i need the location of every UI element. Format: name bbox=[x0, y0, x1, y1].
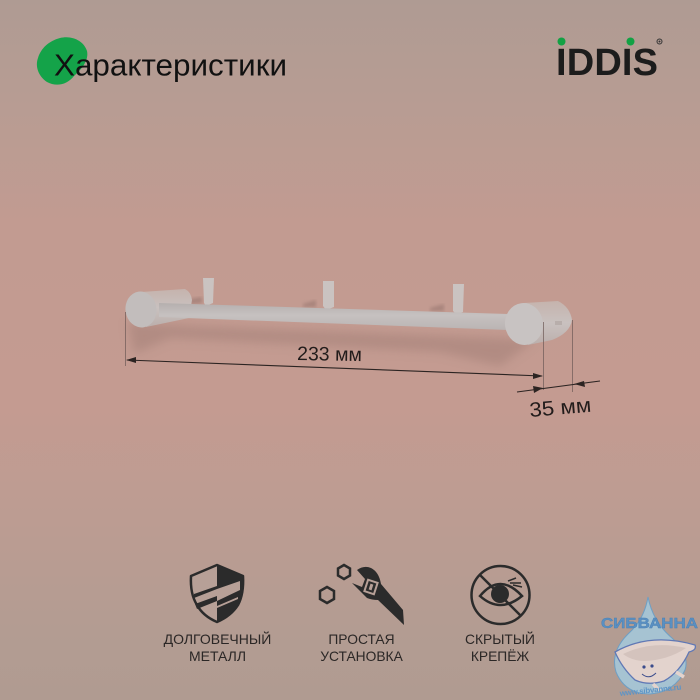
watermark: Сибванна logo bbox=[601, 597, 699, 698]
label: ДОЛГОВЕЧНЫЙ МЕТАЛЛ: ДОЛГОВЕЧНЫЙ bbox=[164, 630, 271, 647]
heading: Характеристики: Характеристики bbox=[54, 48, 287, 82]
label: СКРЫТЫЙ КРЕПЁЖ: КРЕПЁЖ bbox=[471, 648, 529, 664]
left mount bbox=[123, 289, 192, 329]
icon: shield bbox=[191, 565, 243, 622]
hooks bbox=[203, 278, 464, 314]
label: ПРОСТАЯ УСТАНОВКА: ПРОСТАЯ bbox=[328, 632, 395, 647]
feature: hidden fastening bbox=[465, 566, 535, 664]
wall shadows bbox=[128, 297, 535, 366]
logo: IDDIS: IDDIS bbox=[556, 42, 658, 84]
icon: water drop bbox=[614, 597, 686, 694]
feature: durable metal bbox=[164, 565, 271, 664]
label: СКРЫТЫЙ КРЕПЁЖ: СКРЫТЫЙ bbox=[465, 630, 535, 647]
heading: Характеристики bbox=[37, 37, 287, 85]
dimension: 233 мм bbox=[126, 312, 544, 390]
icon: smiling bathtub bbox=[615, 640, 695, 691]
icon: crossed out eye bbox=[472, 566, 530, 624]
dimension: 35 мм bbox=[517, 320, 600, 422]
horizontal bar bbox=[159, 303, 508, 330]
feature: simple installation bbox=[320, 565, 404, 664]
dimension: 35 мм: 35 мм bbox=[528, 394, 592, 422]
dimension: 233 мм: 233 мм bbox=[297, 343, 362, 366]
label: СИБВАННА: СИБВАННА bbox=[601, 616, 699, 632]
icon: wrench and nuts bbox=[320, 565, 404, 625]
label: website: www.sibvanna.ru bbox=[618, 683, 682, 698]
product: wall rail with hooks bbox=[123, 278, 572, 366]
right mount bbox=[502, 301, 572, 347]
label: ДОЛГОВЕЧНЫЙ МЕТАЛЛ: МЕТАЛЛ bbox=[189, 648, 246, 664]
label: ПРОСТАЯ УСТАНОВКА: УСТАНОВКА bbox=[320, 649, 404, 664]
